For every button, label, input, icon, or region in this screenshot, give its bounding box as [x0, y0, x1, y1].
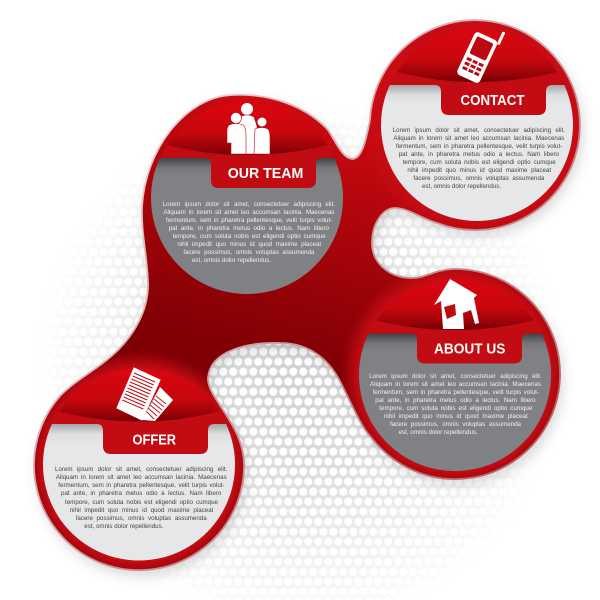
text block: our team: Lorem ipsum dolor sit amet, consectetuer adipiscing elit.: [163, 201, 335, 208]
text block: contact: pat ante, in pharetra metus odio a lectus. Nam libero: [399, 151, 559, 158]
text block: about us: nihil impedit quo minus id quod maxime placeat: [384, 413, 528, 420]
text block: our team: tempore, cum soluta nobis est eligendi optio cumque: [173, 233, 326, 240]
text block: about us: Lorem ipsum dolor sit amet, consectetuer adipiscing elit.: [369, 373, 542, 380]
our team grey panel: [147, 158, 347, 298]
contact dome: [397, 29, 557, 82]
text block: offer: [55, 466, 227, 530]
text block: our team: fermentum, sem in pharetra pellentesque, velit turpis volut-: [166, 217, 332, 224]
text block: our team: nihil impedit quo minus id quod maxime placeat: [177, 241, 321, 248]
offer light panel: [39, 424, 239, 564]
text block: contact: fermentum, sem in pharetra pellentesque, velit turpis volut-: [396, 143, 562, 150]
panel: offer: [39, 364, 239, 564]
text block: about us: est, omnis dolor repellendus.: [399, 429, 478, 436]
text block: our team: [163, 201, 335, 264]
text block: offer: nihil impedit quo minus id quod maxime placeat: [70, 507, 213, 514]
our team dome: [167, 102, 327, 155]
about us grey panel: [353, 334, 553, 474]
text block: offer: pat ante, in pharetra metus odio a lectus. Nam libero: [61, 490, 221, 497]
panel: our team: [147, 98, 347, 298]
text block: contact: Lorem ipsum dolor sit amet, consectetuer adipiscing elit.: [393, 127, 565, 134]
text block: about us: facere possimus, omnis voluptas assumenda: [390, 421, 521, 428]
text block: contact: [393, 127, 565, 190]
icon: team of people: [227, 103, 270, 154]
text block: about us: pat ante, in pharetra metus odio a lectus. Nam libero: [375, 397, 536, 404]
text block: our team: est, omnis dolor repellendus.: [192, 257, 271, 264]
text block: about us: tempore, cum soluta nobis est eligendi optio cumque: [379, 405, 532, 412]
heading: offer: OFFER: [133, 431, 176, 448]
panel: contact: [377, 25, 577, 225]
text block: offer: fermentum, sem in pharetra pellentesque, velit turpis volut-: [58, 482, 225, 489]
text block: contact: nihil impedit quo minus id quod maxime placeat: [407, 167, 551, 174]
text block: about us: fermentum, sem in pharetra pellentesque, velit turpis volut-: [373, 389, 539, 396]
text block: about us: [369, 373, 542, 436]
text block: contact: tempore, cum soluta nobis est eligendi optio cumque: [403, 159, 556, 166]
panel: about us: [353, 273, 553, 474]
about us dome: [376, 279, 534, 330]
text block: about us: Aliquam in lorem sit amet leo accumsan lacinia. Maecenas: [370, 381, 541, 388]
text block: offer: facere possimus, omnis voluptas assumenda: [76, 515, 207, 522]
text block: contact: Aliquam in lorem sit amet leo accumsan lacinia. Maecenas: [393, 135, 564, 142]
text block: offer: Lorem ipsum dolor sit amet, consectetuer adipiscing elit.: [55, 466, 227, 473]
text block: our team: Aliquam in lorem sit amet leo accumsan lacinia. Maecenas: [163, 209, 334, 216]
icon: paper documents: [117, 368, 173, 421]
icon: house: [434, 279, 479, 329]
text block: offer: Aliquam in lorem sit amet leo accumsan lacinia. Maecenas: [56, 474, 227, 481]
text block: contact: est, omnis dolor repellendus.: [422, 183, 501, 190]
contact light panel: [377, 85, 577, 225]
text block: contact: facere possimus, omnis voluptas assumenda: [413, 175, 544, 182]
offer dome: [59, 368, 219, 422]
heading: contact: CONTACT: [460, 92, 524, 109]
text block: our team: pat ante, in pharetra metus odio a lectus. Nam libero: [169, 225, 329, 232]
text block: our team: facere possimus, omnis voluptas assumenda: [183, 249, 314, 256]
heading: our team: OUR TEAM: [228, 165, 303, 182]
text block: offer: est, omnis dolor repellendus.: [84, 523, 163, 530]
heading: about us: ABOUT US: [434, 340, 505, 357]
text block: offer: tempore, cum soluta nobis est eligendi optio cumque: [65, 498, 218, 506]
icon: mobile phone: [456, 21, 505, 85]
